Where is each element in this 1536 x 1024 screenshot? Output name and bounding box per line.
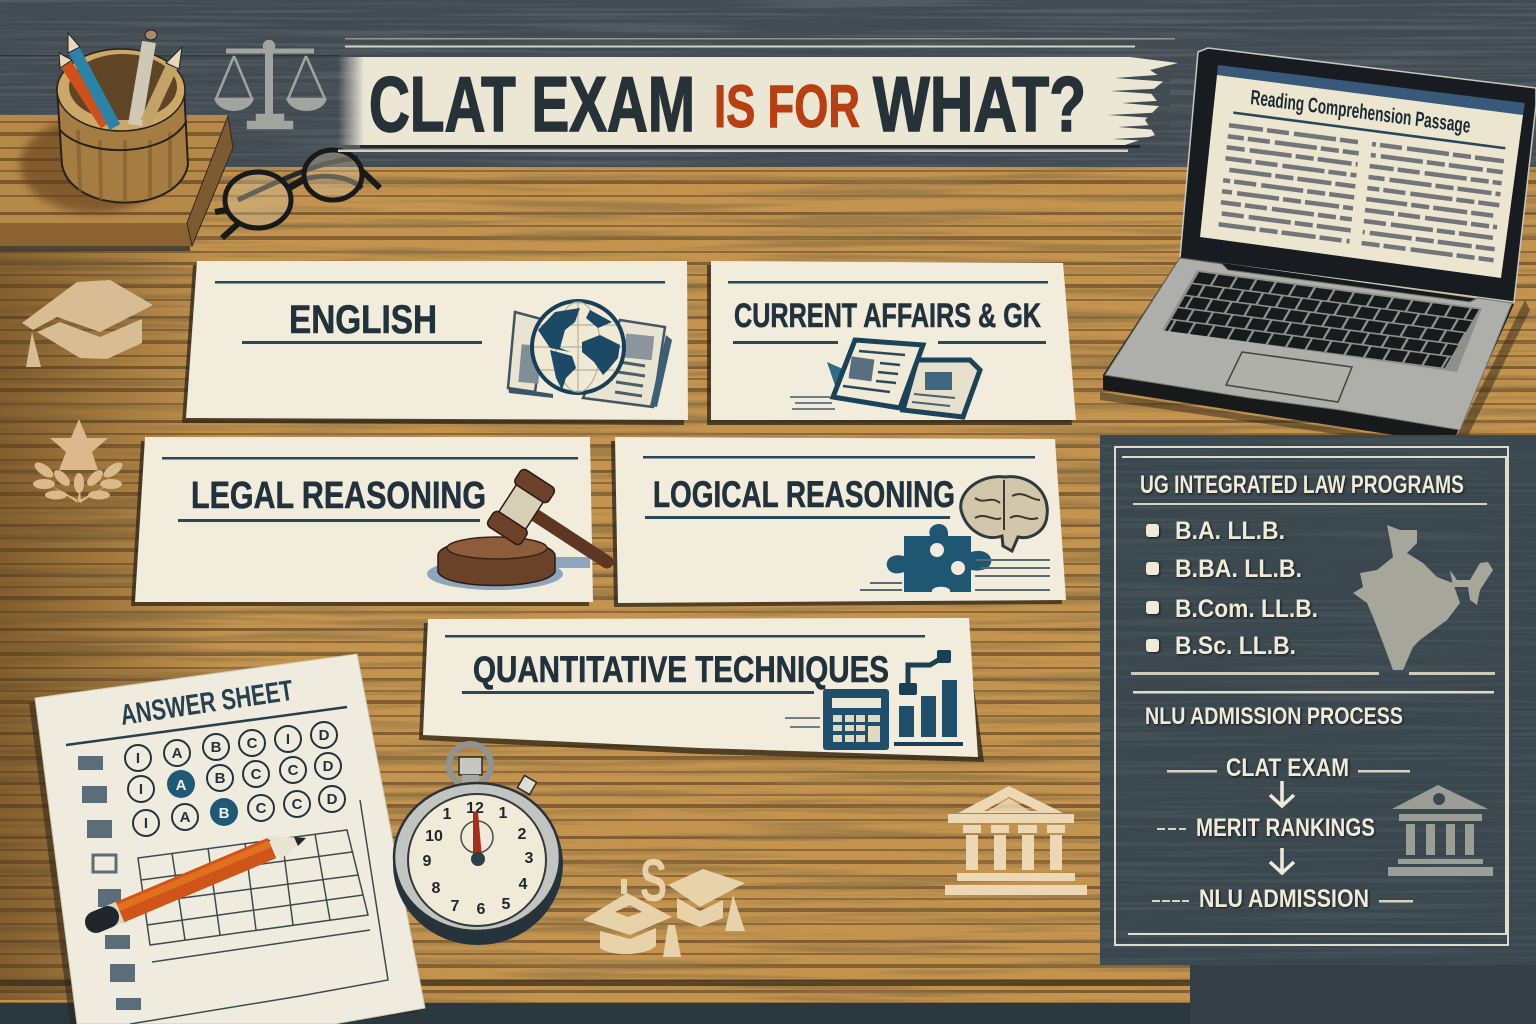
step: NLU admission: NLU ADMISSION bbox=[1199, 885, 1369, 913]
panel: programs and admission bbox=[1100, 435, 1536, 965]
trackpad bbox=[1226, 352, 1352, 402]
icon: bar chart bbox=[894, 650, 963, 746]
bubble letters: B bbox=[215, 770, 226, 787]
stopwatch numbers: 7 bbox=[451, 898, 460, 915]
step: merit rankings: MERIT RANKINGS bbox=[1196, 814, 1375, 842]
bubble letters: A bbox=[180, 809, 191, 826]
bubble letters: C bbox=[292, 796, 303, 813]
icon: glasses bbox=[215, 150, 380, 238]
icon: courthouse bbox=[1388, 785, 1493, 876]
stopwatch numbers: 10 bbox=[425, 828, 443, 845]
bubble letters: A bbox=[172, 745, 183, 762]
program list: B.BA. LL.B. bbox=[1175, 555, 1302, 583]
heading: Legal Reasoning: LEGAL REASONING bbox=[191, 475, 486, 517]
cup body bbox=[57, 88, 188, 202]
banner frayed end bbox=[1108, 74, 1170, 142]
stopwatch numbers: 9 bbox=[423, 853, 432, 870]
answer sheet bbox=[29, 654, 425, 1024]
stopwatch numbers: 8 bbox=[432, 880, 441, 897]
title text: what: WHAT? bbox=[873, 60, 1086, 148]
title banner bbox=[338, 38, 1178, 152]
icon: India map bbox=[1353, 525, 1493, 670]
stopwatch numbers: 1 bbox=[443, 806, 452, 823]
bubble letters: D bbox=[323, 758, 334, 775]
icon: faded graduation caps: S bbox=[640, 847, 667, 914]
icon: calculator bbox=[785, 689, 889, 750]
program list bbox=[1146, 517, 1318, 660]
bubble letters bbox=[136, 727, 338, 832]
bubble letters: C bbox=[288, 762, 299, 779]
stopwatch numbers: 2 bbox=[518, 826, 527, 843]
title text: CLAT EXAM bbox=[369, 60, 695, 148]
bubble letters: D bbox=[319, 727, 330, 744]
panel double frame bbox=[1115, 447, 1508, 945]
stopwatch numbers: 1 bbox=[499, 805, 508, 822]
laptop base bbox=[1103, 257, 1514, 444]
stopwatch numbers: 6 bbox=[477, 901, 486, 918]
bubble letters: C bbox=[256, 800, 267, 817]
dark top wall band bbox=[0, 0, 1536, 167]
dark bottom strip bbox=[0, 960, 1536, 1024]
answer sheet heading: ANSWER SHEET bbox=[118, 675, 295, 732]
bubble letters: D bbox=[327, 791, 338, 808]
heading: Quantitative Techniques: QUANTITATIVE TECHNIQUES bbox=[473, 649, 889, 690]
icon: newspapers bbox=[790, 340, 980, 417]
stopwatch numbers: 5 bbox=[502, 896, 511, 913]
icon: brain bbox=[961, 477, 1047, 551]
icon: laptop bbox=[1100, 48, 1536, 452]
bubble letters: C bbox=[251, 766, 262, 783]
program list: B.Com. LL.B. bbox=[1175, 595, 1318, 623]
stopwatch numbers: 12 bbox=[466, 800, 484, 817]
card: Legal Reasoning bbox=[131, 437, 607, 606]
passage text lines bbox=[1219, 125, 1504, 260]
icon: pencil bbox=[96, 836, 306, 922]
bubble letters: B bbox=[219, 805, 230, 822]
arrow bbox=[1270, 848, 1294, 873]
icon: faded graduation caps bbox=[583, 847, 745, 957]
step: CLAT exam: CLAT EXAM bbox=[1226, 754, 1349, 782]
answer grid bbox=[130, 800, 388, 1024]
icon: gavel bbox=[427, 468, 607, 590]
bubble letters: I bbox=[136, 750, 140, 767]
screen with reading passage bbox=[1200, 75, 1523, 278]
bubble letters: A bbox=[176, 777, 187, 794]
stopwatch numbers: 4 bbox=[519, 876, 528, 893]
bubble letters: B bbox=[211, 739, 222, 756]
browser bar bbox=[1217, 65, 1525, 115]
bubble grid bbox=[125, 722, 345, 836]
icon: faded star and leaves bbox=[32, 419, 125, 503]
stopwatch numbers bbox=[423, 800, 534, 918]
pencil: tan bbox=[146, 47, 182, 122]
bubble letters: I bbox=[139, 781, 143, 798]
icon: scales of justice bbox=[216, 41, 325, 128]
pencil: blue bbox=[68, 33, 115, 127]
cup rim bbox=[57, 49, 185, 131]
bubble letters: C bbox=[247, 735, 258, 752]
program list: B.Sc. LL.B. bbox=[1175, 632, 1296, 660]
keyboard bbox=[1162, 270, 1482, 372]
icon: stopwatch bbox=[393, 744, 563, 945]
stopwatch numbers: 3 bbox=[525, 850, 534, 867]
heading: Logical Reasoning: LOGICAL REASONING bbox=[653, 474, 955, 515]
arrow bbox=[1270, 781, 1294, 806]
icon: faded courthouse on desk bbox=[945, 786, 1087, 895]
heading: Current Affairs & GK: CURRENT AFFAIRS & GK bbox=[734, 297, 1041, 335]
laptop lid bbox=[1180, 48, 1536, 302]
card: Current Affairs and GK bbox=[707, 261, 1076, 425]
card: Logical Reasoning bbox=[611, 437, 1066, 607]
heading: NLU admission process: NLU ADMISSION PROCESS bbox=[1145, 703, 1403, 730]
icon: puzzle piece bbox=[860, 524, 1050, 592]
laptop shadow bbox=[1100, 300, 1530, 452]
program list: B.A. LL.B. bbox=[1175, 517, 1285, 545]
side marks bbox=[78, 756, 141, 1010]
heading: English: ENGLISH bbox=[289, 298, 437, 342]
title text: is for: IS FOR bbox=[714, 73, 860, 140]
pencil: grey bbox=[135, 30, 157, 125]
wooden shelf block bbox=[0, 115, 233, 251]
icon: faded graduation cap bbox=[22, 280, 153, 367]
pencil: red bbox=[59, 53, 106, 125]
bubble letters: I bbox=[144, 815, 148, 832]
card: English bbox=[182, 261, 688, 425]
card: Quantitative Techniques bbox=[419, 618, 984, 762]
bubble letters: I bbox=[286, 731, 290, 748]
icon: globe and newspaper bbox=[508, 301, 672, 407]
icon: pencil cup with pencils bbox=[57, 30, 188, 202]
